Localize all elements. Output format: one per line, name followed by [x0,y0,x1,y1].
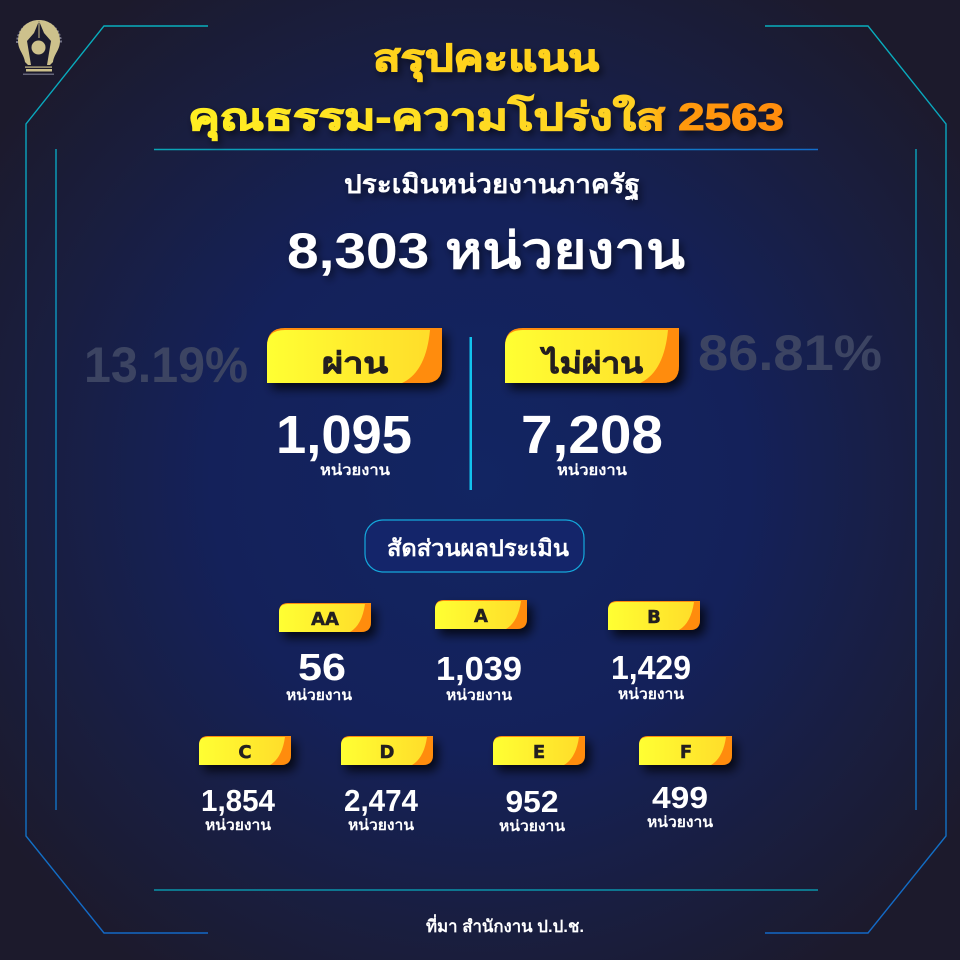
grade D [341,736,433,834]
subtitle: ประเมินหน่วยงานภาครัฐ [344,169,640,202]
total: 8,303 หน่วยงาน [287,223,685,279]
grade C: 1,854 [201,783,276,818]
section pill [365,520,584,572]
grade C [199,736,291,834]
pass tag: ผ่าน [322,348,388,380]
fail tag [505,328,679,383]
fail count: หน่วยงาน [557,462,628,479]
pass tag [267,328,442,383]
grade E: E [533,742,545,763]
grade F: 499 [652,780,708,815]
pass count: 1,095 [276,405,412,465]
grade B: B [647,607,661,628]
grade B: หน่วยงาน [618,686,685,703]
title line 2: คุณธรรม-ความโปร่งใส 2563 [188,94,784,141]
grade F [639,736,732,831]
grade B [608,601,700,703]
logo [17,20,61,75]
fail count: 7,208 [521,405,663,465]
grade A [435,600,527,704]
fail tag: ไม่ผ่าน [540,346,643,380]
grade AA: 56 [298,647,346,689]
grade AA [279,603,371,704]
grade B: 1,429 [611,649,691,686]
grade AA: AA [311,609,339,630]
fail percentage: 86.81% [698,325,882,381]
grade E: หน่วยงาน [499,818,566,835]
grade A: 1,039 [436,650,522,687]
grade F: หน่วยงาน [647,814,714,831]
grade AA: หน่วยงาน [286,687,353,704]
grade D: D [380,742,394,763]
grade A: A [474,606,488,627]
title line 1: สรุปคะแนน [373,38,599,82]
pass count: หน่วยงาน [320,462,391,479]
section pill: สัดส่วนผลประเมิน [387,535,569,561]
center divider [470,337,472,490]
grade C: C [238,742,252,763]
pass percentage: 13.19% [84,337,248,393]
grade A: หน่วยงาน [446,687,513,704]
grade E [493,736,585,835]
grade D: หน่วยงาน [348,817,415,834]
grade D: 2,474 [344,783,419,818]
grade C: หน่วยงาน [205,817,272,834]
grade E: 952 [506,784,558,819]
grade F: F [680,742,692,763]
source note: ที่มา สำนักงาน ป.ป.ช. [426,914,584,936]
